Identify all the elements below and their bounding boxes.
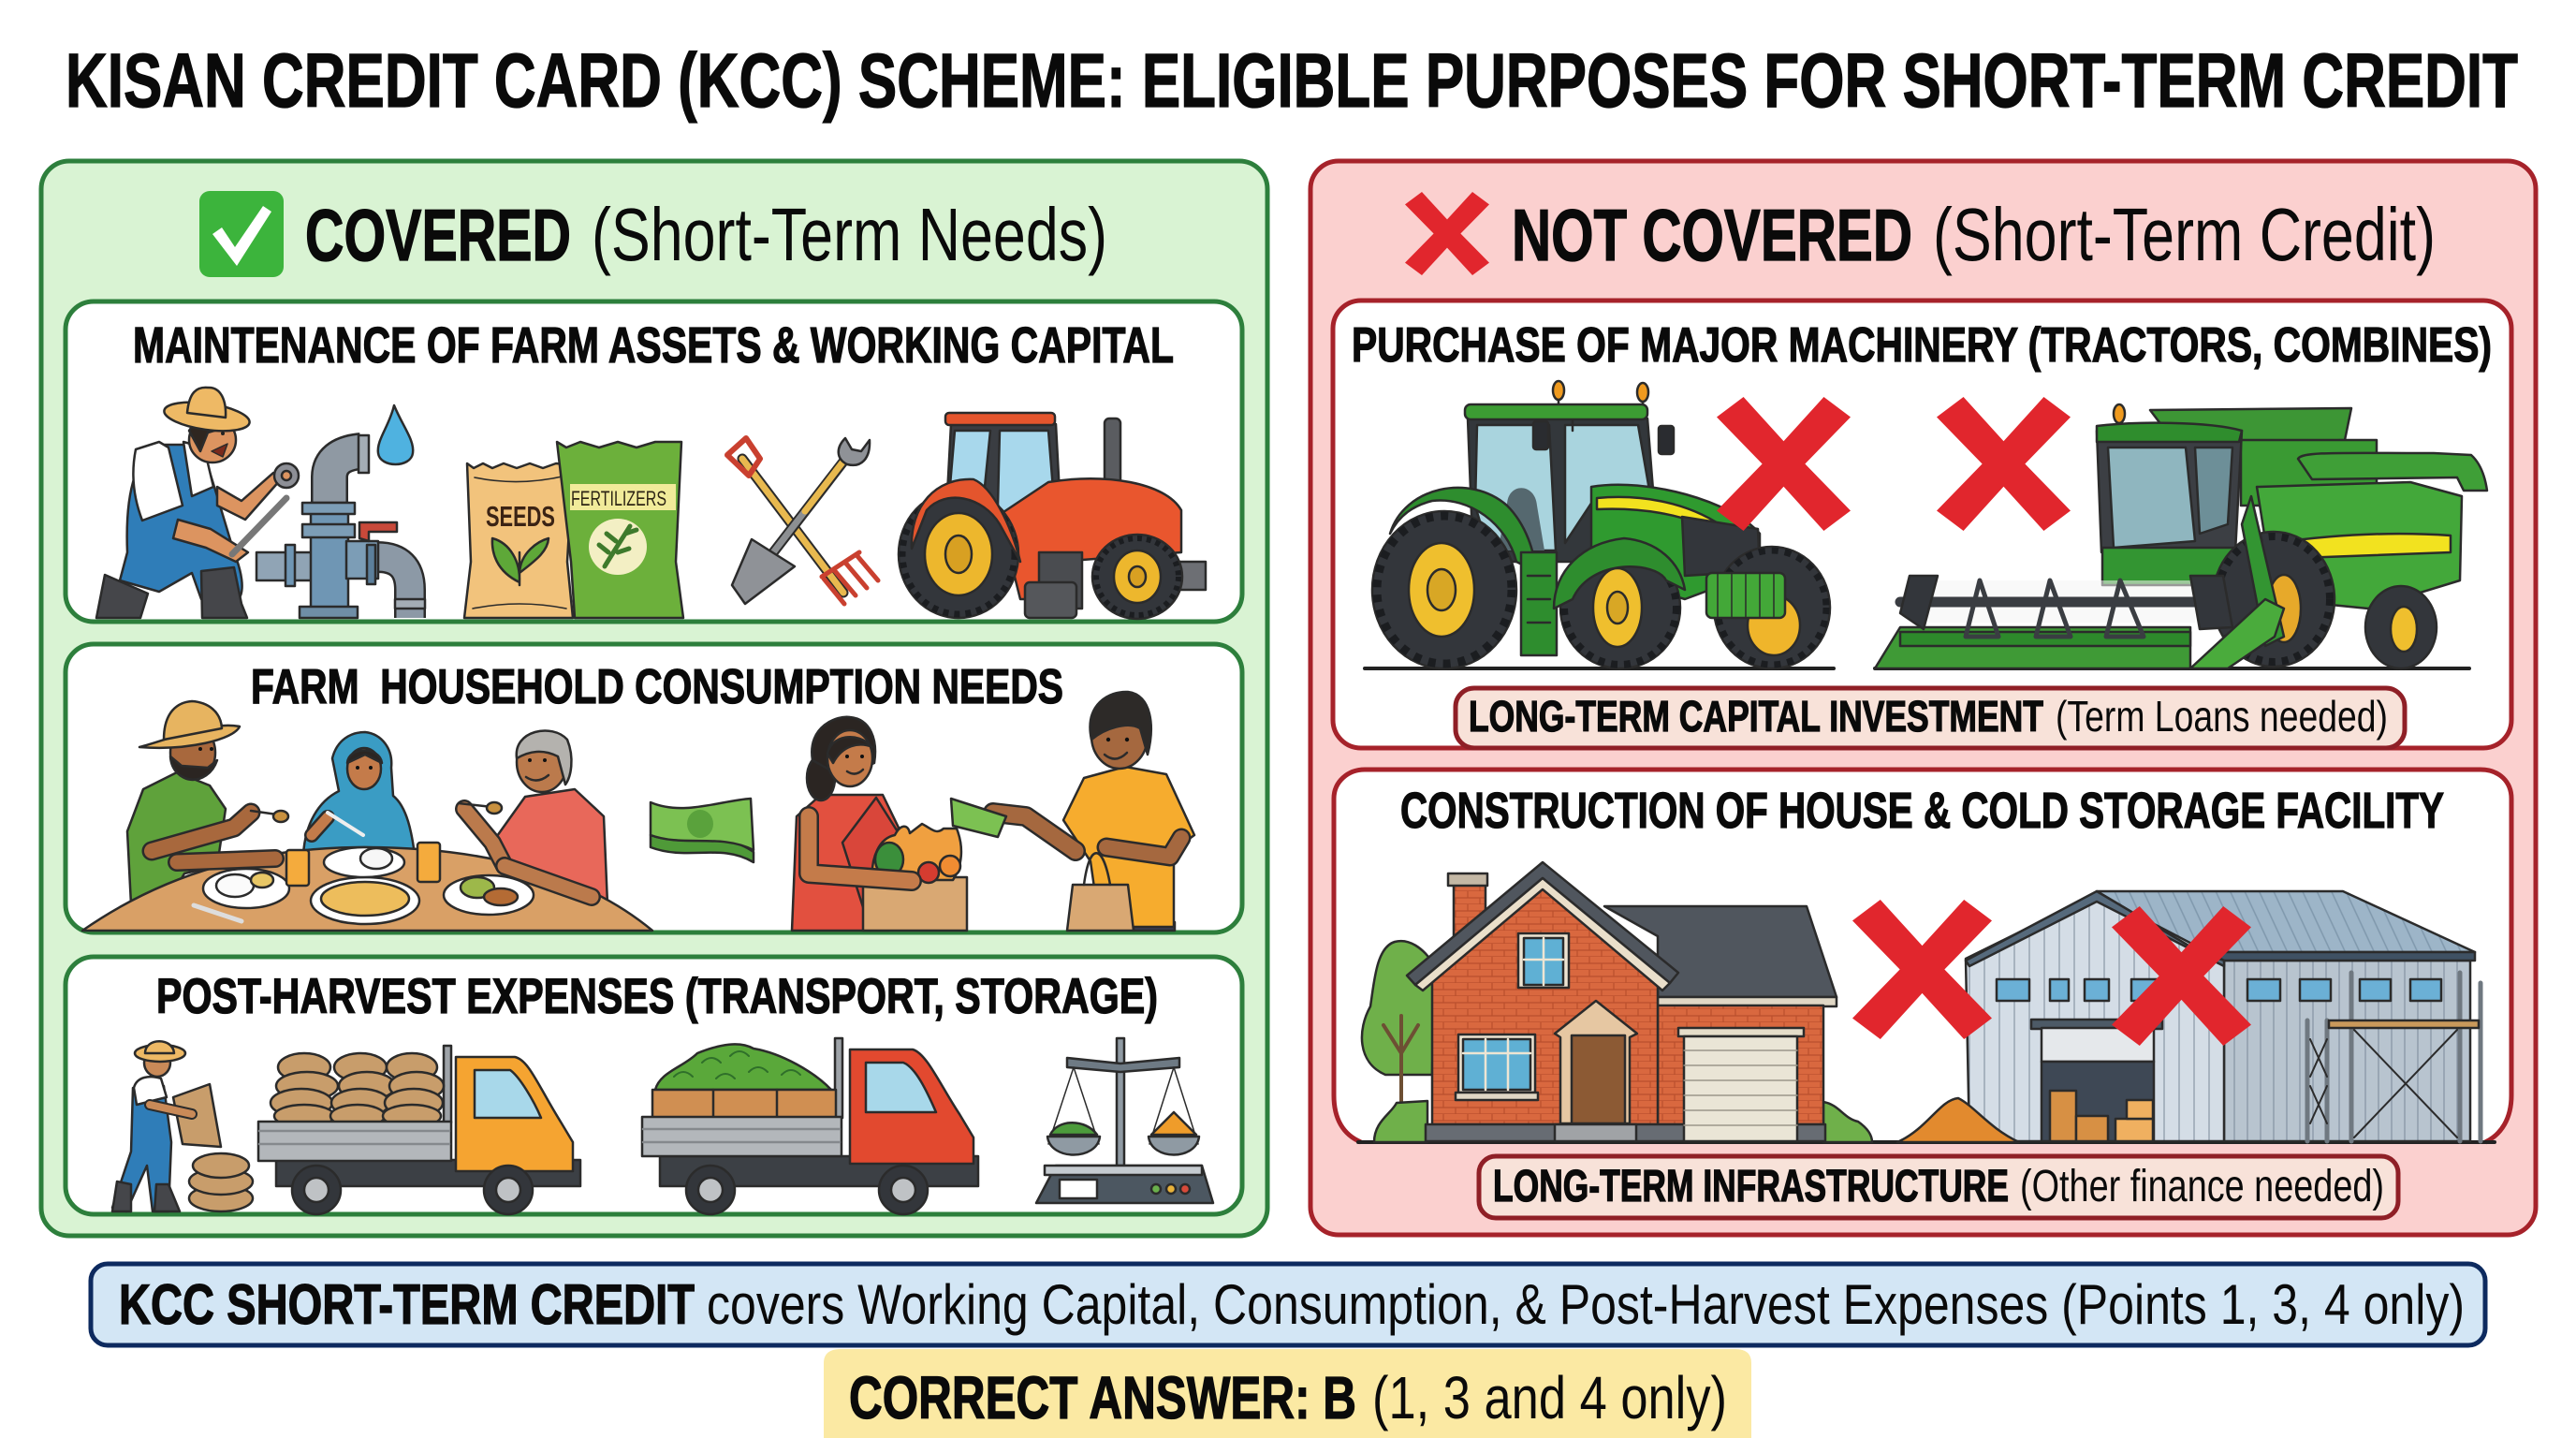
card: maintenance of farm assets bbox=[66, 301, 1242, 622]
callout: long-term infrastructure: (Other finance needed) bbox=[2020, 1162, 2384, 1211]
heading: covered bbox=[305, 193, 1107, 276]
callout: long-term capital investment: LONG-TERM CAPITAL INVESTMENT bbox=[1469, 692, 2043, 741]
illustration: seeds bag bbox=[464, 463, 573, 618]
panel: not covered bbox=[1310, 161, 2536, 1235]
icon: red cross over house bbox=[1852, 900, 1992, 1039]
card heading: FARM HOUSEHOLD CONSUMPTION NEEDS bbox=[251, 660, 1063, 714]
callout: long-term infrastructure bbox=[1479, 1156, 2398, 1218]
card heading: MAINTENANCE OF FARM ASSETS & WORKING CAPITAL bbox=[133, 317, 1174, 374]
card: construction of house and cold storage bbox=[1334, 770, 2511, 1142]
illustration: red tractor bbox=[899, 413, 1206, 619]
illustration: fertilizers bag: FERTILIZERS bbox=[571, 487, 666, 510]
illustration: man paying bbox=[951, 692, 1194, 931]
illustration: combine harvester bbox=[1875, 404, 2487, 668]
heading: not covered: (Short-Term Credit) bbox=[1933, 193, 2436, 276]
summary bar: KCC SHORT-TERM CREDIT bbox=[119, 1273, 695, 1336]
panel: covered bbox=[41, 161, 1267, 1236]
callout: long-term capital investment: (Term Loans needed) bbox=[2056, 692, 2388, 741]
illustration: red truck with produce bbox=[642, 1038, 978, 1214]
card: post-harvest expenses bbox=[66, 957, 1242, 1214]
illustration: brick house bbox=[1358, 862, 2495, 1142]
callout: long-term infrastructure: LONG-TERM INFRASTRUCTURE bbox=[1493, 1162, 2009, 1211]
icon: green check bbox=[199, 191, 284, 277]
illustration: seeds bag: SEEDS bbox=[486, 500, 555, 533]
illustration: worker with sacks bbox=[112, 1041, 253, 1211]
summary bar bbox=[91, 1264, 2485, 1345]
icon: red cross bbox=[1405, 192, 1489, 275]
card heading: POST-HARVEST EXPENSES (TRANSPORT, STORAGE) bbox=[156, 969, 1158, 1024]
heading: not covered: NOT COVERED bbox=[1512, 194, 1912, 276]
heading: covered: (Short-Term Needs) bbox=[592, 193, 1107, 276]
illustration: orange truck with sacks bbox=[258, 1046, 580, 1214]
icon: red cross over warehouse bbox=[2112, 906, 2251, 1046]
illustration: weighing scale bbox=[1036, 1038, 1213, 1203]
illustration: woman with groceries bbox=[792, 717, 967, 931]
illustration: fertilizers bag bbox=[557, 442, 683, 618]
card: farm household consumption needs bbox=[66, 644, 1242, 932]
illustration: crossed tools bbox=[727, 438, 878, 604]
illustration: farmer repairing pump bbox=[96, 388, 299, 618]
icon: red cross over combine bbox=[1937, 397, 2071, 531]
icon: money notes bbox=[651, 799, 754, 862]
correct answer box: (1, 3 and 4 only) bbox=[1372, 1364, 1727, 1431]
heading: not covered bbox=[1512, 193, 2436, 276]
illustration: cold storage warehouse bbox=[1897, 891, 2481, 1142]
card: purchase of major machinery bbox=[1333, 301, 2511, 748]
callout: long-term capital investment bbox=[1456, 688, 2405, 748]
correct answer box: CORRECT ANSWER: B bbox=[849, 1364, 1356, 1431]
heading: covered: COVERED bbox=[305, 194, 571, 276]
correct answer box bbox=[824, 1349, 1751, 1438]
icon: red cross over tractor bbox=[1717, 397, 1851, 531]
illustration: green tractor bbox=[1365, 381, 1834, 668]
illustration: family eating at table bbox=[82, 701, 652, 931]
illustration: water pump and drop bbox=[256, 405, 425, 618]
